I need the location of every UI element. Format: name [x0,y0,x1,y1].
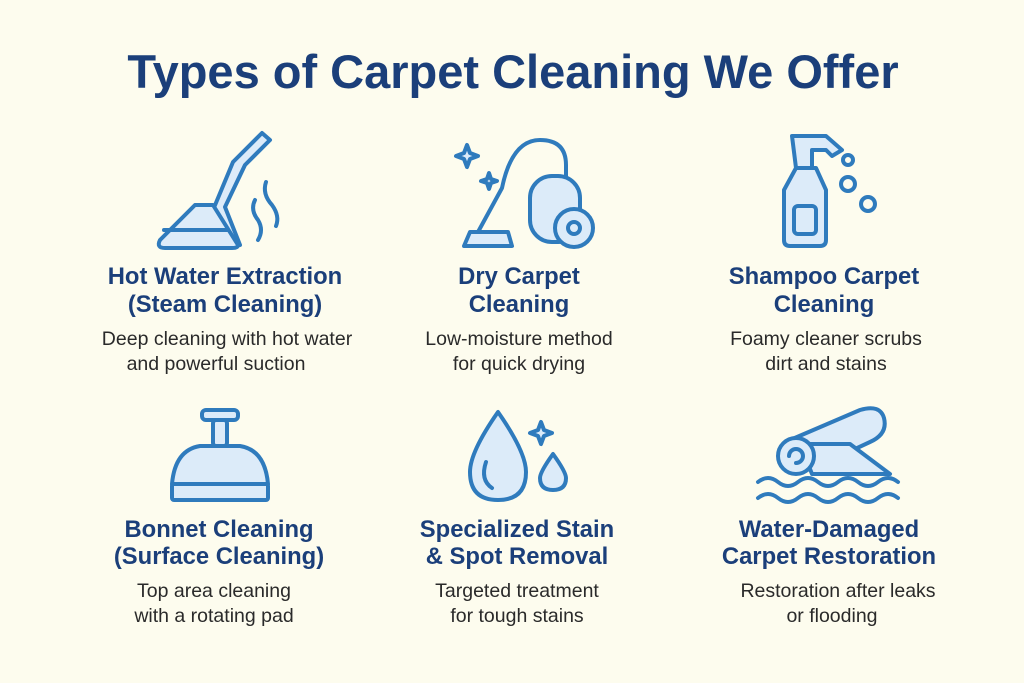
heading: Water-Damaged [739,516,919,543]
heading: Hot Water Extraction [108,263,342,290]
panel: water damage [722,408,936,627]
description: Top area cleaning [137,580,291,602]
panel: hot water extraction: and powerful suction [127,353,305,375]
description: Foamy cleaner scrubs [730,328,922,350]
heading: Bonnet Cleaning [124,516,314,543]
icon: rolled carpet on waves [758,408,898,502]
heading: Specialized Stain [420,516,614,543]
description: Deep cleaning with hot water [102,328,353,350]
panel: stain removal: & Spot Removal [426,543,608,570]
panel: dry carpet cleaning: for quick drying [453,353,585,375]
panel: bonnet cleaning: (Surface Cleaning) [114,543,324,570]
icon: spray bottle [784,136,875,246]
panel: water damage: Carpet Restoration [722,543,936,570]
panel: dry carpet cleaning [425,140,613,375]
panel: stain removal: for tough stains [450,605,584,627]
panel: shampoo: Cleaning [774,291,874,318]
panel: dry carpet cleaning: Cleaning [469,291,569,318]
panel: bonnet cleaning: with a rotating pad [133,605,294,627]
panel: shampoo: dirt and stains [765,353,887,375]
description: Targeted treatment [435,580,599,602]
description: Restoration after leaks [740,580,936,602]
panel: stain removal [420,412,614,627]
icon: bonnet machine [172,410,268,500]
heading: Dry Carpet [458,263,580,290]
icon: drops [470,412,566,500]
panel: bonnet cleaning [114,410,324,627]
description: Low-moisture method [425,328,613,350]
panel: water damage: or flooding [786,605,878,627]
heading: Shampoo Carpet [729,263,919,290]
panel: hot water extraction: (Steam Cleaning) [128,291,322,318]
icon: vacuum [456,140,593,247]
icon: steam cleaner [159,133,277,248]
panel: hot water extraction [102,133,353,375]
panel: shampoo [729,136,922,375]
title: Types of Carpet Cleaning We Offer [127,45,899,98]
